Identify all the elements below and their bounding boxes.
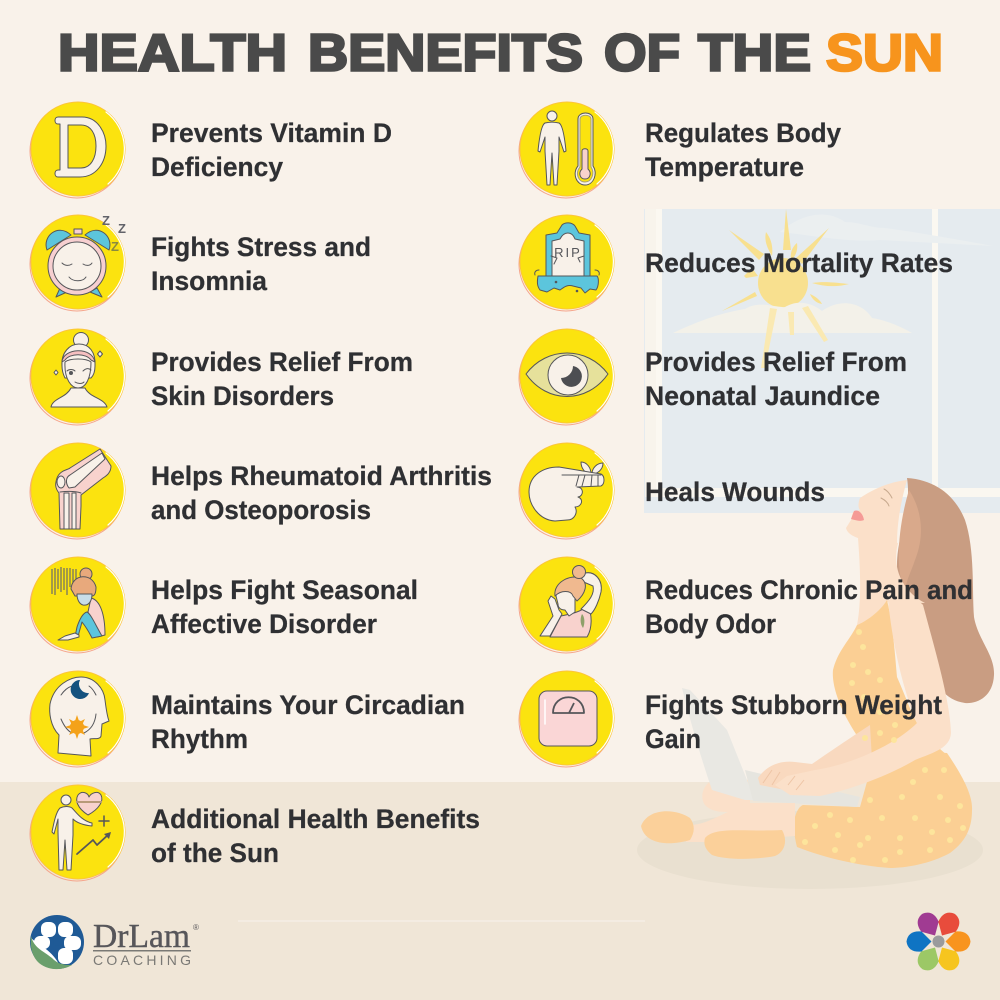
label: Affective Disorder bbox=[151, 609, 377, 639]
front slipper bbox=[704, 830, 785, 859]
footer divider bbox=[238, 920, 645, 922]
label: of the Sun bbox=[151, 838, 279, 868]
benefit: chronic pain and body odor bbox=[519, 557, 973, 653]
woman illustration bbox=[641, 478, 994, 868]
logo mark bbox=[30, 915, 84, 969]
face bbox=[65, 359, 91, 388]
benefit: stress and insomnia bbox=[30, 213, 371, 311]
benefit: stubborn weight gain bbox=[519, 671, 942, 767]
hair bbox=[555, 577, 585, 601]
label: Temperature bbox=[645, 152, 804, 182]
label: Rhythm bbox=[151, 724, 248, 754]
sleep letters: Z bbox=[118, 221, 126, 236]
benefit: body temperature bbox=[519, 102, 841, 198]
bun bbox=[74, 332, 88, 348]
label: Reduces Chronic Pain and bbox=[645, 575, 973, 605]
label: Fights Stubborn Weight bbox=[645, 690, 942, 720]
logo rule bbox=[93, 950, 191, 952]
icon: knee joint coin bbox=[30, 443, 125, 539]
benefit: circadian rhythm bbox=[30, 671, 465, 767]
sleep letters: Z bbox=[102, 213, 110, 228]
white petals bbox=[34, 922, 81, 964]
icon: head with moon and sun coin bbox=[30, 671, 125, 767]
far arm and hand bbox=[758, 725, 872, 790]
label: Fights Stress and bbox=[151, 232, 371, 262]
icon: sad seated woman coin bbox=[30, 557, 125, 653]
label: Regulates Body bbox=[645, 118, 841, 148]
sleep letters: Z bbox=[111, 239, 119, 254]
benefit: mortality rates bbox=[519, 215, 953, 311]
label: Reduces Mortality Rates bbox=[645, 248, 953, 278]
neck and chest bbox=[857, 538, 925, 625]
face bbox=[846, 480, 907, 544]
bodice bbox=[833, 600, 947, 762]
logo: DrLam Coaching bbox=[30, 915, 199, 969]
icon: woman raising arm coin bbox=[519, 557, 614, 653]
title: THE bbox=[698, 25, 811, 83]
RIP text: RIP bbox=[554, 245, 582, 260]
title: SUN bbox=[826, 25, 943, 83]
raised arm bbox=[579, 573, 601, 614]
hand and forearm bbox=[540, 596, 562, 636]
floor shadow bbox=[637, 811, 983, 889]
label: Prevents Vitamin D bbox=[151, 118, 392, 148]
label: Insomnia bbox=[151, 266, 268, 296]
icon: sleeping alarm clock coin bbox=[30, 213, 126, 311]
label: Additional Health Benefits bbox=[151, 804, 480, 834]
icon: letter D coin bbox=[30, 102, 125, 198]
headband bbox=[62, 351, 95, 362]
white swoosh bbox=[31, 938, 60, 968]
high cloud bbox=[780, 215, 993, 246]
back hair bbox=[897, 478, 994, 703]
skirt bbox=[794, 753, 972, 868]
sleep letters bbox=[102, 213, 126, 254]
laptop screen bbox=[682, 688, 755, 800]
icon: winking woman coin bbox=[30, 329, 125, 425]
icon: RIP gravestone coin bbox=[519, 215, 614, 311]
sun bbox=[65, 715, 89, 739]
benefit: seasonal affective disorder bbox=[30, 557, 418, 653]
wordmark: DrLam bbox=[93, 918, 190, 955]
icon: person with heart and chart coin bbox=[30, 785, 125, 881]
label: Helps Fight Seasonal bbox=[151, 575, 418, 605]
dress polka dots bbox=[802, 629, 966, 863]
laptop keyboard bbox=[745, 770, 860, 807]
back knee bbox=[702, 777, 750, 812]
icon: six-petal flower bbox=[906, 909, 970, 974]
registered mark: ® bbox=[193, 923, 199, 932]
icon: person and thermometer coin bbox=[519, 102, 614, 198]
label: Helps Rheumatoid Arthritis bbox=[151, 461, 492, 491]
fingers bbox=[763, 770, 804, 790]
lips bbox=[851, 510, 864, 521]
label: Provides Relief From bbox=[151, 347, 413, 377]
icon: bathroom scale coin bbox=[519, 671, 614, 767]
front shin bbox=[686, 803, 795, 842]
window illustration bbox=[644, 209, 1000, 513]
benefit: skin disorders bbox=[30, 329, 413, 425]
title: BENEFITS bbox=[308, 25, 583, 83]
label: Neonatal Jaundice bbox=[645, 381, 880, 411]
sun rays over cloud bbox=[761, 306, 828, 368]
label: Body Odor bbox=[645, 609, 776, 639]
hair bbox=[62, 344, 95, 378]
benefit: arthritis and osteoporosis bbox=[30, 443, 492, 539]
benefit: heals wounds bbox=[519, 443, 825, 539]
pink top bbox=[550, 606, 591, 637]
moon bbox=[71, 680, 89, 699]
hair streaks bbox=[899, 490, 921, 592]
near arm and hand bbox=[775, 599, 951, 796]
icon: eye coin bbox=[519, 329, 614, 425]
sun in window bbox=[722, 209, 849, 313]
label: Skin Disorders bbox=[151, 381, 334, 411]
benefit: neonatal jaundice bbox=[519, 329, 907, 425]
label: Maintains Your Circadian bbox=[151, 690, 465, 720]
shoulders bbox=[51, 388, 107, 407]
label: Heals Wounds bbox=[645, 477, 825, 507]
benefit: additional health benefits bbox=[30, 785, 480, 881]
benefit: vitamin D bbox=[30, 102, 392, 198]
back slipper bbox=[641, 811, 694, 843]
title: OF bbox=[604, 25, 680, 83]
icon: bandaged finger coin bbox=[519, 443, 614, 539]
label: Provides Relief From bbox=[645, 347, 907, 377]
coaching tagline: COACHING bbox=[93, 952, 191, 968]
cloud bbox=[673, 303, 912, 333]
title: HEALTH bbox=[58, 25, 287, 83]
green crescent bbox=[31, 936, 72, 969]
label: Deficiency bbox=[151, 152, 283, 182]
label: and Osteoporosis bbox=[151, 495, 371, 525]
eye bbox=[881, 489, 892, 506]
label: Gain bbox=[645, 724, 701, 754]
face and neck bbox=[556, 588, 575, 616]
